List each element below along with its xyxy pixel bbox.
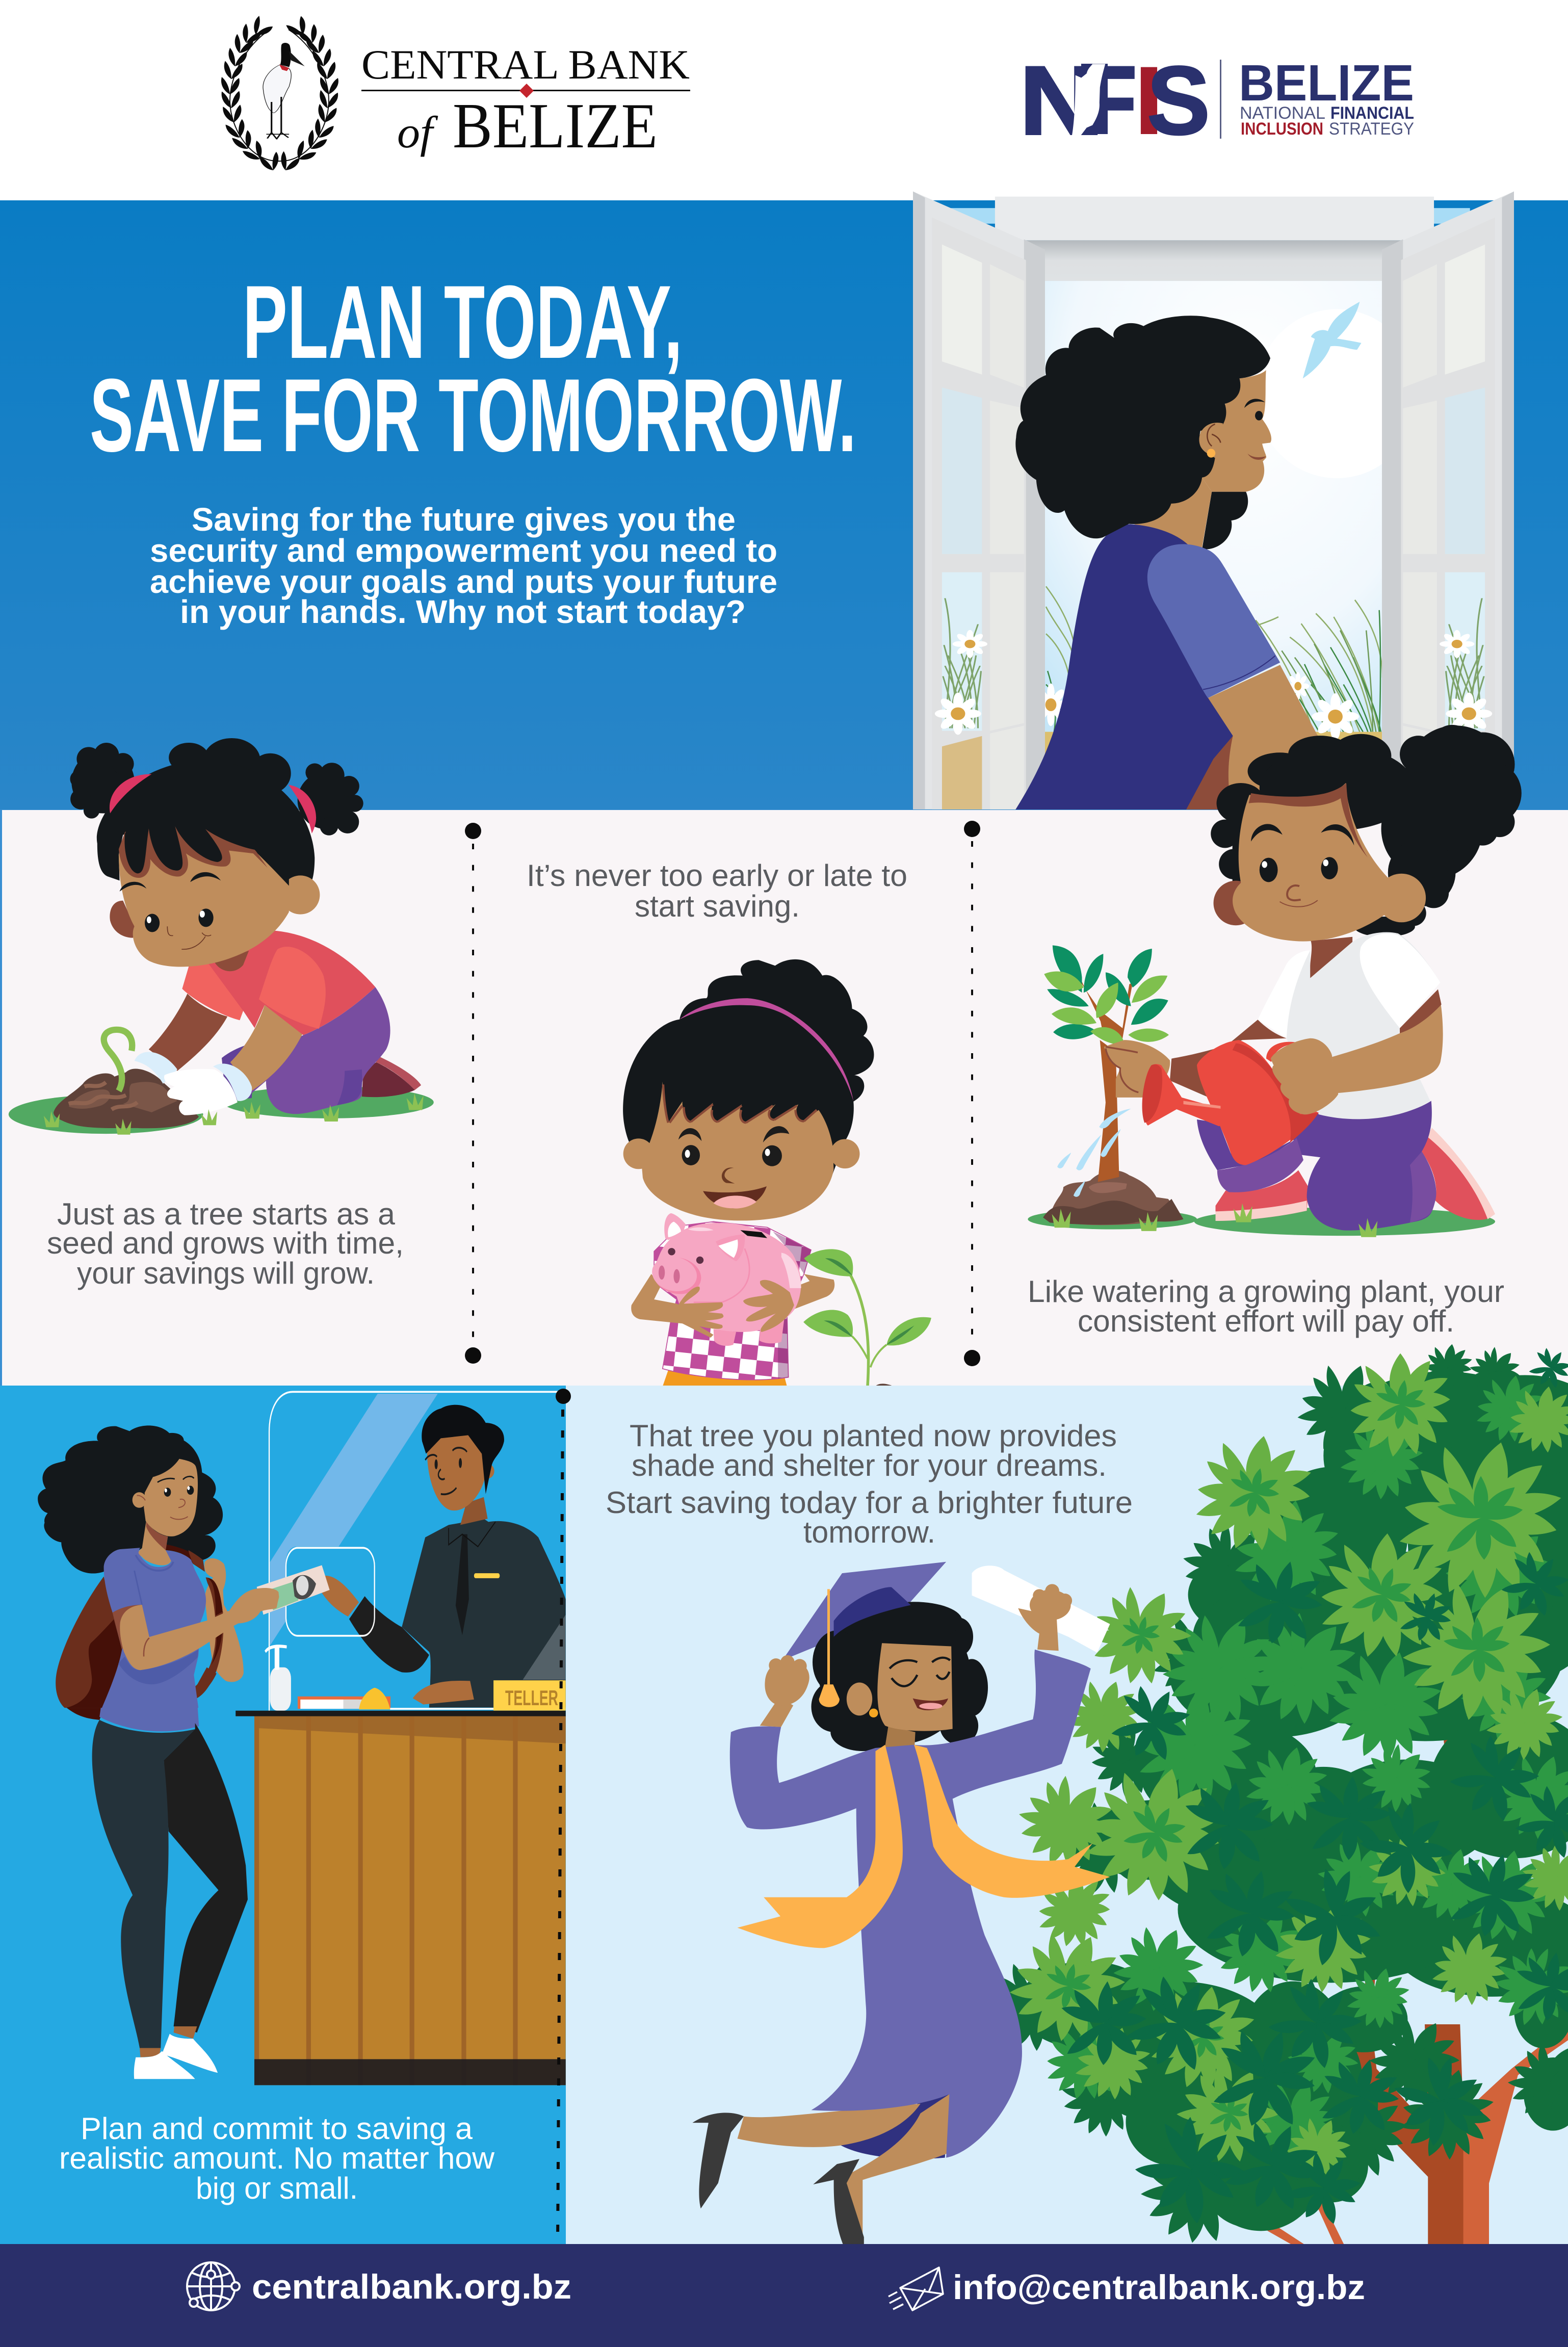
icon: Belize map cut-out (1072, 64, 1105, 136)
shirt (182, 931, 375, 1035)
title: PLAN TODAY, (243, 264, 683, 380)
gold stole (738, 1745, 1110, 1948)
text: plan and commit: Plan and commit to saving a (81, 2111, 473, 2146)
arms (149, 994, 306, 1091)
illustration: customer upper body (38, 1425, 279, 1708)
illustration: child watering plant (1028, 725, 1522, 1237)
canopy base (1018, 1371, 1568, 2231)
face (110, 800, 320, 967)
wordmark (361, 41, 690, 162)
text: never too early: start saving. (635, 889, 800, 923)
daisies (1033, 672, 1359, 740)
illustration: woman looking out (1015, 316, 1337, 810)
legs and shoes (692, 2094, 949, 2246)
legs and shoe (222, 987, 421, 1114)
text: tree seed: seed and grows with time, (47, 1226, 404, 1260)
hair dome (623, 1005, 854, 1175)
sleeve (1147, 544, 1280, 698)
sky background (940, 208, 1470, 734)
teller (320, 1405, 566, 1708)
illustration: tree trunk (1267, 1973, 1568, 2246)
logo: NFIS Belize (1020, 46, 1414, 155)
hem line (1203, 656, 1275, 690)
intro paragraph: Saving for the future gives you the (192, 501, 736, 538)
seedling (803, 1249, 931, 1387)
face (847, 1643, 953, 1783)
text: tree shade: Start saving today for a brighter future (606, 1485, 1133, 1520)
lower hair (1202, 492, 1248, 550)
gloves (135, 1052, 252, 1115)
text: plan and commit: big or small. (196, 2171, 358, 2205)
intro paragraph (150, 501, 777, 630)
plant mound (1043, 1170, 1183, 1225)
skirt (663, 1370, 787, 1387)
small glass window (286, 1548, 375, 1636)
face (1233, 783, 1426, 942)
panel: bright blue bottom left (0, 1386, 566, 2244)
hair bands (110, 774, 316, 833)
hair and buns (70, 738, 363, 886)
bag (56, 1577, 122, 1708)
teller nameplate (493, 1680, 566, 1711)
arms and hands (760, 1584, 1072, 1727)
grass (1046, 586, 1382, 732)
strap lower (195, 1577, 223, 1699)
BELIZE wordmark (1239, 55, 1414, 139)
cap (782, 1562, 946, 1660)
text: tree shade (606, 1419, 1133, 1549)
right window door (1382, 192, 1514, 810)
watering can (1142, 1040, 1319, 1165)
tassel (819, 1589, 840, 1707)
hair (1211, 725, 1522, 937)
gown (730, 1650, 1091, 2158)
cap underside (834, 1587, 911, 1637)
hair (811, 1602, 988, 1751)
intro paragraph: security and empowerment you need to (150, 532, 777, 569)
NFIS letters: F (1075, 46, 1137, 155)
canopy mid foliage (1044, 1370, 1568, 2176)
BELIZE wordmark: NATIONAL (1240, 103, 1325, 123)
sun glow (1256, 309, 1418, 478)
dress (654, 1221, 811, 1380)
illustration: open window frame and sky (940, 197, 1470, 734)
arm (1208, 665, 1337, 810)
grass patches (1028, 1207, 1495, 1236)
NFIS letters: I (1133, 46, 1165, 155)
branches in canopy (1407, 1426, 1454, 1778)
neck (139, 1521, 171, 1566)
illustration: big tree canopy (980, 1338, 1568, 2260)
NFIS letters: S (1147, 46, 1210, 155)
text: plan and commit: realistic amount. No matter how (59, 2141, 495, 2175)
illustration: graduate jumping (692, 1562, 1110, 2246)
soil mound (54, 1069, 199, 1128)
ears (623, 1138, 859, 1169)
hair (38, 1425, 223, 1574)
text: tree seed (47, 1197, 404, 1290)
title (90, 264, 856, 474)
divider (1220, 60, 1221, 139)
neck (1129, 478, 1212, 547)
piggy bank (649, 1213, 801, 1346)
back arm (1170, 1020, 1287, 1098)
email: info@centralbank.org.bz (953, 2268, 1365, 2307)
text: tree shade: shade and shelter for your dreams. (632, 1448, 1107, 1482)
divider: first dotted line (465, 823, 481, 1364)
icon: globe (187, 2262, 240, 2310)
divider: second dotted line (964, 821, 980, 1366)
BELIZE wordmark: STRATEGY (1329, 119, 1414, 139)
grass tufts (44, 1093, 424, 1135)
divider: teller panel dotted line (556, 1389, 571, 2243)
BELIZE wordmark: FINANCIAL (1330, 103, 1414, 123)
canopy light foliage (997, 1353, 1568, 2188)
wordmark: of (397, 108, 438, 158)
title: SAVE FOR TOMORROW. (90, 357, 856, 474)
ear and earring (1199, 423, 1223, 458)
hands (677, 1280, 794, 1338)
panel: pale blue bottom right (566, 1386, 1568, 2244)
canopy edge foliage (980, 1338, 1568, 2260)
counter (236, 1711, 566, 2085)
BELIZE wordmark: INCLUSION (1241, 119, 1323, 139)
intro paragraph: in your hands. Why not start today? (180, 593, 746, 630)
panel: light middle band (0, 810, 1568, 1386)
teller label: TELLER (505, 1686, 558, 1710)
pants (1197, 1101, 1436, 1231)
arm shadow (1186, 736, 1233, 810)
bag strap (166, 1544, 205, 1572)
wordmark: BELIZE (453, 91, 658, 162)
intro paragraph: achieve your goals and puts your future (150, 563, 777, 600)
canopy dark foliage (1057, 1341, 1568, 2239)
text: watering plant (1028, 1274, 1504, 1338)
left window door (913, 192, 1045, 810)
water drops (1057, 1109, 1131, 1197)
text: watering plant: Like watering a growing plant, your (1028, 1274, 1504, 1309)
shoes (1216, 1128, 1495, 1221)
NFIS letters (1020, 46, 1210, 155)
icon: laurel wreath (221, 15, 338, 173)
text: never too early (527, 858, 907, 923)
dark glass reflection (523, 1615, 566, 1680)
customer lower body (57, 1667, 248, 2079)
near arm (1271, 989, 1443, 1114)
hand holding plant (1104, 1040, 1170, 1098)
neck (1310, 937, 1352, 978)
shirt (102, 1548, 206, 1708)
illustration: girl holding piggy bank (623, 959, 931, 1387)
grass tufts (1052, 1203, 1377, 1237)
banknote (257, 1565, 330, 1615)
leaf highlights (1039, 1375, 1523, 2136)
text: tree seed: your savings will grow. (77, 1256, 375, 1290)
text: tree shade: tomorrow. (803, 1515, 935, 1549)
illustration: girl planting seed (9, 738, 434, 1135)
arms (631, 1274, 834, 1323)
neck (215, 951, 249, 971)
face (642, 1082, 833, 1220)
diploma (972, 1566, 1110, 1653)
NFIS letters: N (1020, 46, 1096, 155)
illustration: garden seen through window (1033, 302, 1418, 813)
text: tree shade: That tree you planted now provides (630, 1419, 1117, 1453)
icon: flying envelope (888, 2267, 943, 2310)
sprout (104, 1030, 132, 1091)
counter items (265, 1645, 493, 1711)
illustration: bank teller scene (57, 1392, 566, 2085)
shirt (1258, 932, 1441, 1119)
left ear (1214, 881, 1258, 925)
deck floor (1045, 732, 1382, 813)
website: centralbank.org.bz (252, 2267, 571, 2306)
back arm and hand (204, 1558, 244, 1682)
facial features (1244, 399, 1266, 460)
illustration: window doors (913, 192, 1514, 810)
icon: jabiru stork (263, 43, 305, 139)
face (1197, 370, 1271, 492)
BELIZE wordmark: BELIZE (1239, 55, 1414, 112)
plant stem (1075, 967, 1133, 1193)
hair (1015, 316, 1270, 538)
grass patches (9, 1086, 434, 1134)
window frame (995, 197, 1434, 281)
wordmark: CENTRAL BANK (361, 41, 690, 88)
panel: footer bar (0, 2244, 1568, 2347)
hair bun (680, 959, 874, 1102)
text: tree seed: Just as a tree starts as a (57, 1197, 396, 1231)
panel: hero background (0, 200, 1568, 810)
face (133, 1459, 198, 1536)
headband (680, 998, 853, 1102)
plant leaves (1044, 945, 1169, 1045)
front arm (113, 1588, 279, 1670)
text: watering plant: consistent effort will pay off. (1078, 1304, 1454, 1338)
text: never too early: It’s never too early or late to (527, 858, 907, 893)
text: plan and commit (59, 2111, 495, 2205)
dress (1015, 524, 1280, 810)
logo: Central Bank of Belize (221, 15, 690, 173)
glass shield (269, 1392, 566, 1711)
icon: bird (1303, 302, 1362, 378)
